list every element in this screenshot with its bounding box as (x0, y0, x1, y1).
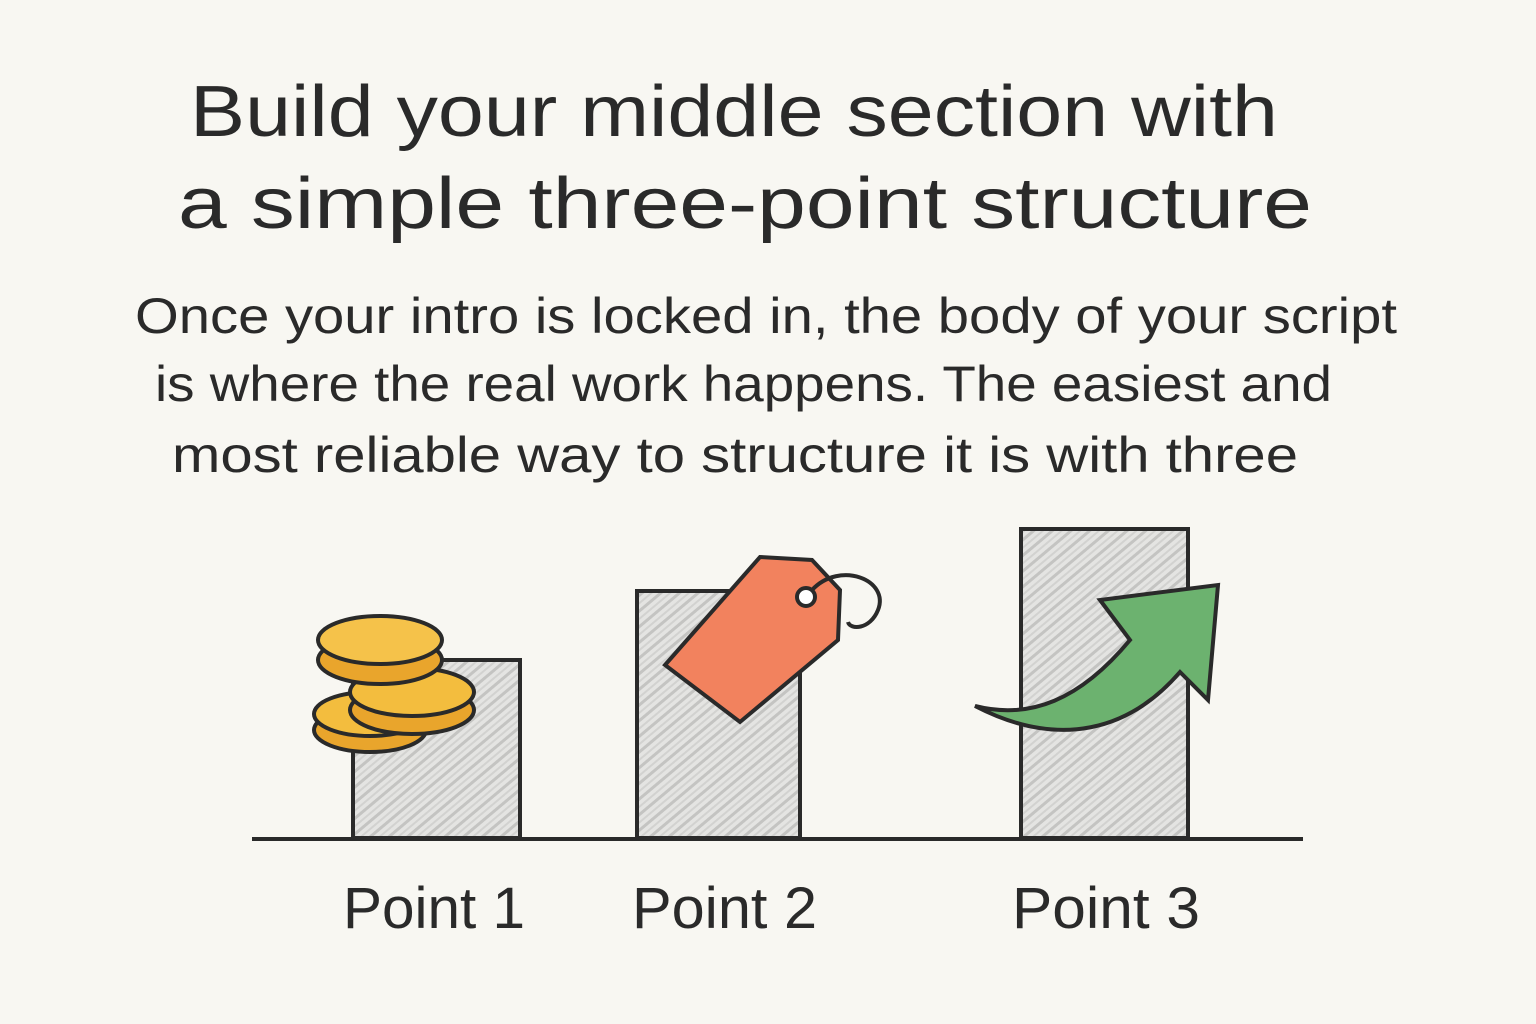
icon: growth arrow (975, 585, 1218, 730)
labels: Point 1 (343, 876, 525, 941)
labels (343, 876, 1200, 941)
bar: point 2 (637, 591, 800, 838)
title (178, 72, 1312, 244)
title: a simple three-point structure (178, 164, 1312, 244)
intro paragraph: is where the real work happens. The easiest and (155, 356, 1332, 412)
intro paragraph: most reliable way to structure it is with three (172, 427, 1298, 483)
labels: Point 2 (632, 876, 817, 941)
baseline axis (252, 837, 1303, 841)
icon: price tag (665, 557, 880, 722)
intro paragraph (135, 288, 1397, 483)
bar: point 1 (353, 660, 520, 838)
bar: point 3 (1021, 529, 1188, 838)
labels: Point 3 (1012, 876, 1200, 941)
icon: coins (314, 616, 474, 752)
bar chart (252, 529, 1303, 839)
intro paragraph: Once your intro is locked in, the body of your script (135, 288, 1397, 344)
title: Build your middle section with (190, 72, 1278, 152)
